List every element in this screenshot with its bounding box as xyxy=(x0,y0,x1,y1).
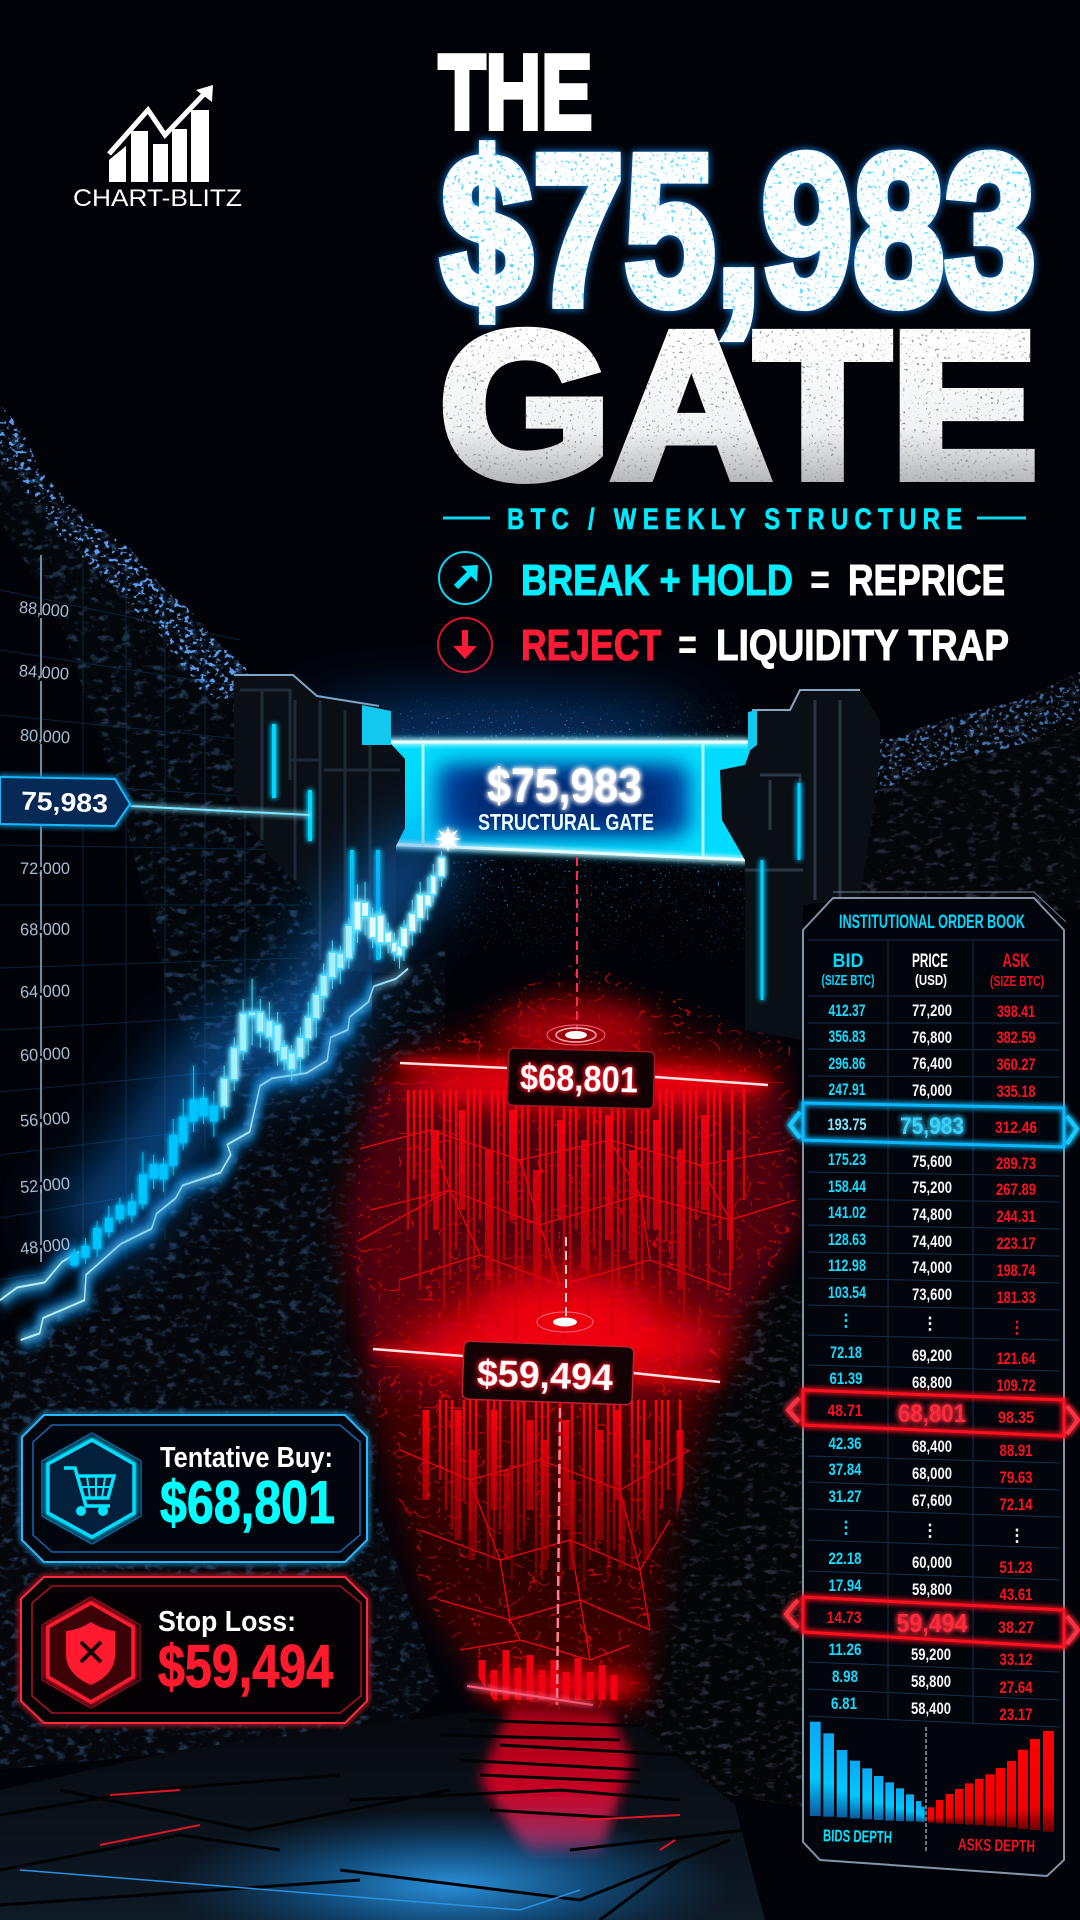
price column: 60,000 xyxy=(912,1553,952,1572)
ask column: 198.74 xyxy=(996,1261,1036,1280)
bid column: 37.84 xyxy=(828,1460,862,1479)
ask column: 33.12 xyxy=(1000,1650,1032,1669)
value: $59,494 xyxy=(158,1633,334,1700)
ask depth bars xyxy=(928,1731,1054,1832)
axis labels: 84,000 xyxy=(18,661,70,684)
bid column: ⋮ xyxy=(838,1518,854,1537)
column headers: (SIZE BTC) xyxy=(990,973,1044,990)
bids depth label: BIDS DEPTH xyxy=(823,1826,892,1847)
bid column xyxy=(826,1001,866,1713)
rock: upper right cliff xyxy=(840,672,1080,910)
ask column xyxy=(995,1002,1037,1724)
column headers: PRICE xyxy=(912,951,948,972)
panel: tentative buy xyxy=(22,1415,367,1562)
level line: 68,801 xyxy=(400,857,768,1109)
label: Tentative Buy: xyxy=(160,1442,333,1474)
level line: 59,494 xyxy=(373,1237,720,1705)
bid column: 72.18 xyxy=(830,1343,862,1362)
price column: 74,000 xyxy=(912,1258,952,1277)
icon: shield in hexagon xyxy=(42,1597,140,1708)
price column: ⋮ xyxy=(922,1314,938,1333)
ask column: 109.72 xyxy=(996,1376,1036,1395)
bid column: 296.86 xyxy=(828,1054,866,1073)
price column: 59,200 xyxy=(911,1645,951,1664)
icon: breakout spark xyxy=(435,826,461,852)
label 68,801 xyxy=(507,1048,655,1109)
bid column: 31.27 xyxy=(828,1487,862,1506)
panel: stop loss xyxy=(21,1577,367,1723)
label: Stop Loss: xyxy=(158,1606,296,1638)
icon: down arrow xyxy=(438,618,492,672)
column headers: (SIZE BTC) xyxy=(822,972,875,989)
ask column: ⋮ xyxy=(1008,1318,1026,1337)
candles: lower section xyxy=(71,1066,217,1267)
bid column: 356.83 xyxy=(828,1027,866,1046)
price column: 67,600 xyxy=(912,1491,952,1510)
price column: ⋮ xyxy=(922,1521,938,1540)
ask column: 181.33 xyxy=(996,1288,1036,1307)
highlight row: 68,801: 68,801 xyxy=(898,1400,966,1428)
ask column: 289.73 xyxy=(996,1154,1036,1173)
rock: right side of chasm xyxy=(600,1280,810,1810)
price column: 68,800 xyxy=(912,1373,952,1392)
rock: upper left cliff xyxy=(0,404,340,1150)
label 59,494 xyxy=(462,1341,634,1405)
ask column: 27.64 xyxy=(1000,1678,1033,1697)
rule: reject: REJECT xyxy=(521,621,661,670)
axis labels: 64,000 xyxy=(20,981,70,1002)
candles: middle section xyxy=(221,918,352,1119)
candles: falling red bars xyxy=(355,1090,795,1700)
price column: 69,200 xyxy=(912,1346,952,1365)
title xyxy=(438,34,1038,522)
ask column: 382.59 xyxy=(996,1028,1036,1047)
price column: 74,800 xyxy=(912,1205,952,1224)
rule: break and hold: BREAK + HOLD xyxy=(521,556,793,605)
axis labels: 72,000 xyxy=(20,859,70,878)
chart grid xyxy=(0,560,300,1290)
rule: reject: = xyxy=(678,620,697,669)
price column: 77,200 xyxy=(912,1001,952,1020)
axis labels: 88,000 xyxy=(18,598,70,621)
ask column: 335.18 xyxy=(996,1082,1036,1101)
price column: 68,400 xyxy=(912,1437,952,1456)
gate banner xyxy=(362,742,750,860)
price axis xyxy=(0,555,310,1262)
price column: 76,800 xyxy=(912,1028,952,1047)
dashed lines xyxy=(565,1237,567,1318)
ask column: 51.23 xyxy=(1000,1558,1032,1577)
price column xyxy=(911,1001,952,1718)
target marker xyxy=(547,1025,605,1045)
target marker xyxy=(537,1312,593,1332)
price tag 75,983: 75,983 xyxy=(21,786,108,819)
ask column: 244.31 xyxy=(996,1207,1036,1226)
price chart candles xyxy=(71,826,461,1267)
value: $68,801 xyxy=(160,1469,335,1536)
asks depth label: ASKS DEPTH xyxy=(958,1835,1035,1856)
bid column: 6.81 xyxy=(831,1694,857,1713)
web network xyxy=(355,1130,795,1660)
candles: upper section xyxy=(354,851,445,969)
gate label: STRUCTURAL GATE xyxy=(478,809,654,835)
rock: lower left cliff xyxy=(0,948,445,1770)
ask column: 88.91 xyxy=(1000,1441,1032,1460)
bid column: 11.26 xyxy=(828,1640,862,1659)
ask column: 121.64 xyxy=(996,1349,1036,1368)
blue glow behind gate columns xyxy=(300,705,700,755)
price column: 68,000 xyxy=(912,1464,952,1483)
column headers: (USD) xyxy=(915,972,947,989)
bid column: 193.75 xyxy=(828,1115,866,1134)
bid column: 128.63 xyxy=(828,1230,866,1249)
axis labels: 60,000 xyxy=(20,1044,70,1065)
bid column: 175.23 xyxy=(828,1150,866,1169)
ask column: 398.41 xyxy=(997,1002,1035,1021)
particles around gate xyxy=(400,690,750,970)
bid column: ⋮ xyxy=(838,1311,854,1330)
column headers: BID xyxy=(832,951,864,972)
price column: 73,600 xyxy=(912,1285,952,1304)
chasm bottom edge xyxy=(467,1686,593,1705)
highlight row: 59,494 xyxy=(786,1597,1078,1647)
axis labels: 68,000 xyxy=(20,920,70,939)
rule: break and hold: = xyxy=(810,555,830,604)
bid column: 112.98 xyxy=(828,1256,866,1275)
bid column: 42.36 xyxy=(828,1434,862,1453)
depth chart xyxy=(810,1722,1054,1856)
subtitle: BTC / WEEKLY STRUCTURE xyxy=(507,501,962,536)
title line: GATE: GATE xyxy=(439,290,1038,522)
axis labels xyxy=(18,598,71,1259)
bid column: 247.91 xyxy=(828,1080,866,1099)
brand logo xyxy=(73,85,242,212)
bid column: 22.18 xyxy=(828,1549,862,1568)
bid column: 103.54 xyxy=(828,1283,866,1302)
column headers: ASK xyxy=(1002,951,1030,972)
ask column: 23.17 xyxy=(1000,1705,1032,1724)
bid column: 48.71 xyxy=(828,1401,862,1420)
label 68,801: $68,801 xyxy=(519,1056,639,1100)
ask column: 72.14 xyxy=(1000,1495,1033,1514)
price column: 75,600 xyxy=(912,1152,952,1171)
axis labels: 48,000 xyxy=(19,1234,71,1259)
price column: 74,400 xyxy=(912,1232,952,1251)
ask column: 98.35 xyxy=(998,1408,1034,1427)
bid column: 17.94 xyxy=(828,1576,862,1595)
price column: 75,200 xyxy=(912,1178,952,1197)
icon: chart logo xyxy=(109,85,213,182)
ask column: 360.27 xyxy=(996,1055,1036,1074)
glowing crack lines xyxy=(0,969,408,1340)
gate pillar left xyxy=(234,675,405,974)
bid column: 8.98 xyxy=(832,1667,858,1686)
column headers xyxy=(822,951,1044,990)
ask column: 223.17 xyxy=(996,1234,1036,1253)
ask column: ⋮ xyxy=(1008,1526,1026,1545)
bid column: 61.39 xyxy=(830,1369,862,1388)
price column: 58,400 xyxy=(911,1699,951,1718)
axis labels: 52,000 xyxy=(19,1174,71,1197)
bid depth bars xyxy=(810,1722,925,1822)
price column: 59,800 xyxy=(912,1580,952,1599)
table grid xyxy=(808,940,1060,1727)
bid column: 141.02 xyxy=(828,1203,866,1222)
chasm: red glow floor xyxy=(343,960,800,1710)
price column: 76,400 xyxy=(912,1054,952,1073)
ask column: 38.27 xyxy=(998,1618,1034,1637)
ask column: 79.63 xyxy=(1000,1468,1032,1487)
dashed drop line xyxy=(576,857,578,1030)
rule: break and hold: REPRICE xyxy=(848,556,1005,605)
icon: up arrow xyxy=(439,552,491,604)
panel: institutional order book xyxy=(786,892,1078,1876)
price column: 58,800 xyxy=(911,1672,951,1691)
highlight row: 75,983: 75,983 xyxy=(900,1113,964,1140)
axis labels: 80,000 xyxy=(20,726,70,747)
price column: 76,000 xyxy=(912,1081,952,1100)
bid column: 412.37 xyxy=(828,1001,866,1020)
highlight row: 59,494: 59,494 xyxy=(896,1608,968,1638)
ask column: 43.61 xyxy=(1000,1585,1032,1604)
rule: reject xyxy=(438,618,1009,672)
brand name: CHART-BLITZ xyxy=(73,185,242,212)
rule: reject: LIQUIDITY TRAP xyxy=(716,621,1009,670)
axis labels: 56,000 xyxy=(19,1108,71,1131)
ask column: 267.89 xyxy=(996,1180,1036,1199)
metal floor xyxy=(0,1706,765,1920)
bid column: 158.44 xyxy=(828,1177,866,1196)
icon: cart in hexagon xyxy=(42,1433,141,1544)
highlight row: 68,801 xyxy=(788,1390,1078,1436)
rule: break and hold xyxy=(439,552,1005,605)
highlight row: 75,983 xyxy=(790,1103,1077,1147)
ask column: 312.46 xyxy=(995,1118,1037,1137)
gate price: $75,983 xyxy=(487,760,642,813)
label 59,494: $59,494 xyxy=(476,1353,614,1398)
gate pillar right xyxy=(720,688,880,1040)
price tag 75,983 xyxy=(0,777,310,826)
title line: THE: THE xyxy=(438,34,592,152)
bid column: 14.73 xyxy=(826,1608,862,1627)
